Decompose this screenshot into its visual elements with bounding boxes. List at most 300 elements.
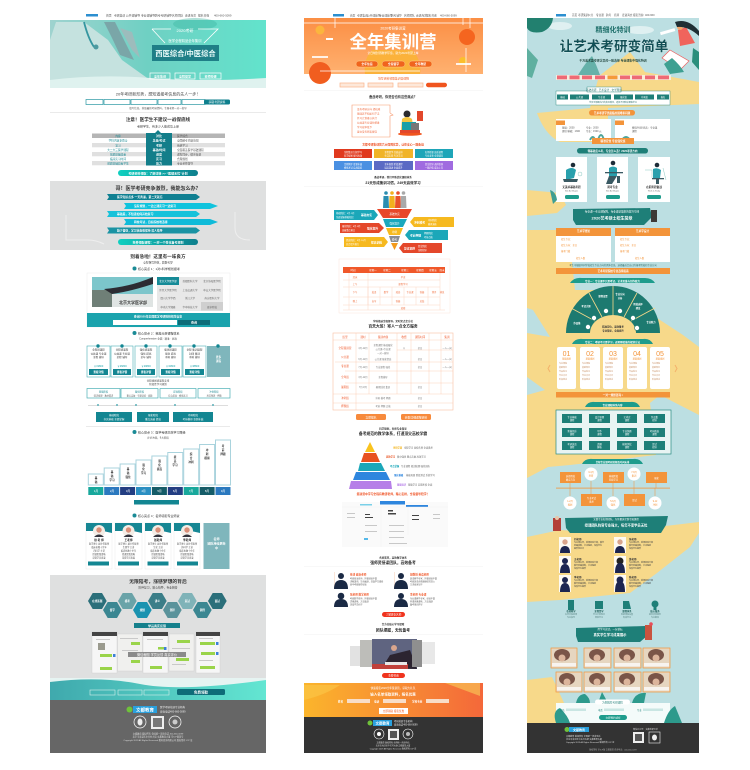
pricing table: 一人一间 xyxy=(442,357,452,361)
teacher profiles: 深受学生喜爱 xyxy=(629,584,641,588)
course form: 报名 xyxy=(661,95,665,99)
service icons: 学习计划制定 xyxy=(593,612,605,616)
footer xyxy=(304,717,483,753)
pyramid chart: 基础学习 定期考核 全面 xyxy=(408,482,433,486)
hexagon badges: 复试 xyxy=(185,599,190,603)
buttons: 获取详细课程资料 xyxy=(405,415,427,419)
pricing table: 6月-12月 xyxy=(358,357,368,361)
course grid: 考研政治 xyxy=(650,429,660,433)
teacher profiles: 深受学生喜爱 xyxy=(629,546,641,550)
panel: annual training camp landing page: 强师资授课团队，高效备考 xyxy=(370,560,416,565)
logo: 医学考研培训专业机构 xyxy=(160,705,186,709)
course grid xyxy=(556,410,671,454)
hero heading: 千万美术类考研学员的一致选择 专业课集中强化特训 xyxy=(579,58,647,62)
footer: Copyright 2019 All Rights Reserved 版权所有 ICP 证 xyxy=(566,740,614,744)
feature cards: 一路护航 成功上岸 xyxy=(425,166,444,170)
pricing table: 专业课程 强化 xyxy=(376,365,391,369)
step chart: 4月 xyxy=(141,489,146,493)
comparison table: 前期基础较差学生 xyxy=(107,162,129,166)
funnel labels: 提高阶段：9月-10月 xyxy=(346,238,366,242)
school grid: 中南大学湘雅 xyxy=(160,305,176,309)
timeline: 考前预测 · 押题 xyxy=(206,394,222,398)
brush heading: teachers: 文都专业名师团队，为你量身定制专属课程 xyxy=(593,517,639,521)
course cards: ￥32800 xyxy=(166,364,176,368)
navigation bar: 报名咨询 xyxy=(426,14,437,18)
school grid: 首都医科大学 xyxy=(182,279,198,283)
pricing table: 3月-12月 xyxy=(358,375,368,379)
comparison table: 前期基础较差 xyxy=(110,152,126,156)
timeline: 3-4月 xyxy=(588,470,594,474)
course cards: 冲刺 辅导 xyxy=(189,355,200,359)
checklist box: 基础差不知如何下手 xyxy=(357,112,380,116)
navigation bar: 跨考 xyxy=(606,13,612,17)
service icons xyxy=(565,600,661,619)
pricing table: 集训内容 xyxy=(378,335,389,339)
course cards: 全程 集训课程 xyxy=(187,348,203,352)
campus photo xyxy=(92,277,153,307)
service icons: 全程督学 xyxy=(594,609,604,613)
course grid: 艺术史 xyxy=(624,415,631,419)
hexagon badges: 讲义 xyxy=(155,599,160,603)
pyramid chart: 强化基础 xyxy=(394,473,404,477)
pricing table: 7月-12月 xyxy=(358,365,368,369)
step chart: 合 xyxy=(190,456,193,460)
school grid: 北京协和医学院 xyxy=(203,279,221,283)
navigation bar: 公共 xyxy=(588,13,594,17)
schedule table: 政治 xyxy=(396,290,401,294)
heading: features: 文都考研集训营六大保障优势，让你安心一路备战 xyxy=(362,142,424,146)
comparison table: 合理规划 xyxy=(177,157,188,161)
button: 了解更多名师 xyxy=(386,613,402,617)
teacher profiles: 李老师 xyxy=(574,575,582,579)
teacher profiles: 授课思路清晰，方法独到 xyxy=(410,600,433,604)
section: alumni feedback xyxy=(50,575,266,679)
five numbered cards: 基础规划 xyxy=(656,356,664,360)
course grid: 考研英语 xyxy=(567,442,577,446)
course grid: 课程 xyxy=(652,432,657,436)
comparison table: 对比 xyxy=(156,133,162,138)
course cards: 全程班课程 xyxy=(92,348,105,352)
navigation bar: 考研集训 xyxy=(578,13,589,17)
footer: 文都教育 版权所有 全国统一咨询电话 xyxy=(376,740,410,744)
timeline: 选择院校 xyxy=(566,474,576,478)
search band: 查询2020年全国医学考研院校招生信息 xyxy=(134,314,182,318)
heading: questions: 备战考研，你是否也有这些痛点？ xyxy=(369,94,417,99)
brush heading: teachers: 授课团队阵容专业强大，每年不变学员无忧 xyxy=(585,522,648,528)
course cards: 查看详情 xyxy=(93,370,104,374)
timeline: 备考 xyxy=(589,500,594,504)
search band: 查询 xyxy=(191,320,197,325)
pink tags xyxy=(556,75,671,80)
five numbered cards: 专业课程 xyxy=(559,361,567,365)
hero banner: 全程督学 xyxy=(388,62,399,66)
service icons: 有效学习 xyxy=(623,615,631,619)
service icons: 提供优质服务 xyxy=(649,612,661,616)
timeline: 阶段性学习规划 xyxy=(149,382,167,386)
teacher cards: 张老师 xyxy=(154,538,162,542)
item heading 3: 核心亮点 3：医学考研高效学习路径 xyxy=(138,430,186,434)
logo xyxy=(126,705,186,714)
teacher cards: 李老师 xyxy=(183,538,191,542)
photo gallery xyxy=(350,639,435,669)
heading: solution: 别着急啦！这里有一味良方 xyxy=(130,253,186,260)
item heading 2: 核心亮点 2：精准分层课程体系 xyxy=(138,330,180,336)
timeline: 专业考试 xyxy=(587,496,597,500)
comparison table: 进度 xyxy=(156,152,162,156)
step chart xyxy=(88,440,230,504)
pricing table: 全日 xyxy=(418,396,422,400)
school grid: 更多院校 xyxy=(207,305,217,309)
info cards: 专业：2000 xyxy=(586,126,599,130)
pricing table: ￥ xyxy=(403,346,405,350)
schedule table: 严格出勤、精准学习，集训效果更有保障 xyxy=(366,260,421,264)
funnel layers: 强化提升 xyxy=(389,222,400,226)
timeline: 9-12 xyxy=(653,501,658,503)
funnel labels xyxy=(334,210,454,253)
feature cards: 复试指导 调剂咨询 xyxy=(425,162,444,166)
schedule table: 时间 xyxy=(350,268,356,272)
enquiry form xyxy=(86,90,230,110)
course grid: 专业快题 xyxy=(622,429,632,433)
navigation bar: 报名咨询 xyxy=(198,14,209,18)
five numbered cards: 作业点评 xyxy=(605,373,613,377)
teal heading xyxy=(577,148,648,154)
panel: medical exam landing page: 考研学生，有多少人能成功上岸 xyxy=(137,124,179,128)
pricing table: 暑期封闭 集训 xyxy=(376,385,391,389)
call-to-action button: 考研资料领取：了解详情 >> “医硕无忧”计划 xyxy=(128,170,188,175)
step chart: 1月 xyxy=(94,489,98,493)
orange-header panels xyxy=(556,228,670,274)
course cards: 强化班课程 xyxy=(164,348,177,352)
schedule table: 答疑 xyxy=(420,290,425,294)
schedule table: 数学 xyxy=(384,290,389,294)
pricing table: 收费 xyxy=(401,335,407,339)
service icons: 督促学习 xyxy=(595,615,603,619)
schedule table: 下午 xyxy=(353,290,358,294)
timetable screenshot xyxy=(342,501,448,547)
orange-header panels: 艺术学理论 xyxy=(577,229,590,233)
timeline: 系统学习 xyxy=(609,478,619,482)
search band xyxy=(87,313,230,327)
button xyxy=(134,623,180,628)
checklist box: 身边没有研友督促 xyxy=(357,130,378,134)
heading: campus: 全方位贴心学习保障 xyxy=(382,622,405,626)
pricing table: 暑期班 xyxy=(341,385,349,389)
brush heading: students xyxy=(576,622,653,642)
five numbered cards: 基础知识 xyxy=(605,365,613,369)
teacher profiles: 专业课名师，授课经验丰富 xyxy=(629,560,653,564)
timeline: 强化 xyxy=(611,502,616,506)
checklist box: 学习效率低下 xyxy=(357,125,373,129)
schedule table: 就寝 xyxy=(401,306,406,310)
teacher cards: 名师 xyxy=(213,536,220,541)
panel: annual training camp landing page: 备考规范的教学体系，打通顶尖高校学霸 xyxy=(359,431,427,436)
teacher cards: 深受学员喜爱 xyxy=(122,556,136,560)
orange-header panels: 报考门槛 xyxy=(620,249,630,253)
hero heading: 精细化特训 xyxy=(596,25,630,34)
navigation bar: 走进海文 xyxy=(185,14,196,18)
orange signup band: 学校专业 xyxy=(412,700,423,704)
step chart: 化 xyxy=(142,467,145,471)
step chart: 提高 xyxy=(157,467,162,471)
footer: 文都教育 xyxy=(573,727,585,732)
navigation bar: 名师团队 xyxy=(172,14,183,18)
hero title: 西医综合/中医综合 xyxy=(155,49,216,58)
course cards: ￥29800 xyxy=(141,364,151,368)
timeline: 知识梳理 · 教材精讲 xyxy=(94,394,114,398)
five numbered cards: 作品练习 xyxy=(582,369,590,373)
hero banner: doctor: 全年集训 xyxy=(154,74,166,78)
course grid: 课程 xyxy=(625,432,630,436)
teacher cards: 临床执教十余年 xyxy=(91,545,107,549)
buttons: 立即报名 xyxy=(365,415,377,419)
pricing table: 全程课程 基础强化 xyxy=(373,343,393,347)
footer: 微信公众号：文都考研艺术 xyxy=(633,727,658,731)
funnel labels: 强化阶段：6月-8月 xyxy=(342,224,360,228)
teacher profiles: 深受学生喜爱 xyxy=(629,566,641,570)
course cards: 查看详情 xyxy=(117,370,128,374)
funnel labels: 考前押题 xyxy=(410,234,421,238)
heading: services: 学科筛选全程督导，定时定点全方位 xyxy=(373,319,413,323)
service icons: 专业指导 xyxy=(567,615,575,619)
schedule table: 周末 xyxy=(439,268,445,272)
section: alumni feedback: 无限陪考，涨感梦想的背后 xyxy=(129,578,187,585)
navigation bar xyxy=(556,13,655,17)
semicircle fan chart: 建议 xyxy=(636,306,641,310)
teacher cards: 外科学 主讲 xyxy=(181,545,194,549)
teal heading 3 xyxy=(572,339,653,344)
pricing table: 全日 xyxy=(418,365,422,369)
step chart: 基 xyxy=(111,470,114,474)
comparison table: 基础/时间 xyxy=(153,147,165,152)
orange pill heading: 艺术考研学员面临的困难和问题 xyxy=(594,111,631,115)
three illustration cards: Non Art Majors xyxy=(606,190,619,192)
navigation bar xyxy=(333,14,457,18)
teacher cards: 医学博士 副主任医师 xyxy=(89,542,110,546)
funnel layers: 模考 xyxy=(392,238,398,242)
service icons: 课程体系 xyxy=(622,609,632,613)
teacher profiles: 考研数学名师，授课经验丰富 xyxy=(350,596,377,600)
pricing table: 全日 xyxy=(418,346,422,350)
five numbered cards: 阶段测试 xyxy=(629,377,637,381)
step chart: 础 xyxy=(127,471,130,475)
step chart: 提 xyxy=(174,455,177,459)
hero banner: doctor: 全程督学 xyxy=(179,74,191,78)
pricing table: 冲刺班 xyxy=(341,396,349,400)
signup form with leaves: 电话 xyxy=(598,708,603,712)
orange-header panels: 招生专业： xyxy=(620,237,632,241)
course cards: 全程 辅导 xyxy=(117,355,128,359)
button: 免费咨询 xyxy=(388,674,399,678)
schedule table: 休息 xyxy=(440,290,445,294)
course cards: 全程 辅导 xyxy=(93,355,104,359)
navigation bar: 400-660-5099 xyxy=(214,14,232,18)
teacher profiles: 深受学员好评 xyxy=(350,602,362,606)
arrow list: 没有规划，一边上课实习一边复习 xyxy=(134,204,176,208)
teacher cards: 团队持续更新 xyxy=(207,540,226,546)
step chart: 3月 xyxy=(126,489,130,493)
timeline: 1-2月 xyxy=(567,499,573,503)
teacher profiles: 专业课名师，授课经验丰富 xyxy=(574,578,598,582)
enquiry form: 获取考研资料 xyxy=(209,100,226,104)
navigation bar: 公共课辅导 xyxy=(126,14,140,18)
brush heading: students: 真实学生学习成果展示 xyxy=(594,632,627,637)
semicircle fan chart xyxy=(566,286,660,333)
item heading 3 xyxy=(132,430,186,440)
teacher cards: 授课思路清晰 xyxy=(122,552,136,556)
course form xyxy=(556,87,670,105)
course cards: 公共课 专业课 xyxy=(114,352,130,356)
panel: art exam intensive training page xyxy=(527,13,699,753)
timeline: 强化 xyxy=(654,476,659,480)
teacher profiles: 胡教授 英语老师 xyxy=(410,572,429,576)
hero title: 全年集训营 xyxy=(350,32,436,52)
funnel labels: 基础夯实 xyxy=(361,213,372,217)
course grid: 课程 xyxy=(597,432,602,436)
navigation bar: 400-660-5099 xyxy=(440,14,457,18)
semicircle fan chart: 考试大纲 xyxy=(581,304,591,308)
feature cards: 全程集训 封闭学习 xyxy=(344,150,362,154)
arrow list: 基础差，不知道如何开始复习 xyxy=(117,212,154,216)
course cards: 全年 辅导 xyxy=(141,355,152,359)
course cards: ￥26800 xyxy=(117,364,127,368)
item heading 4: 核心亮点 4：名师领衔专业师资 xyxy=(138,513,180,518)
arrow list xyxy=(107,194,218,234)
school grid: 上海交通大学 xyxy=(182,288,198,292)
orange pill heading xyxy=(589,110,635,116)
timeline: 考前模拟 查漏补缺 xyxy=(183,417,204,421)
people xyxy=(383,191,406,208)
orange-header panels: 招生方向：全日 xyxy=(620,243,636,247)
step chart: 基 xyxy=(127,467,130,471)
feature cards: 层层递进 全面提升 xyxy=(384,166,403,170)
heading: pyramid: 科学规划，名师专业指导 xyxy=(379,426,407,430)
comparison table: 课程同步，循序渐进 xyxy=(177,152,201,156)
orange-header panels: 招生人数 xyxy=(576,256,586,260)
teacher cards: 徐 老 师 xyxy=(94,538,104,542)
comparison table: 全国统考内容范围 xyxy=(177,138,199,142)
course grid: 复试 xyxy=(652,442,657,446)
hero banner: doctor: 名师授课 xyxy=(204,74,217,78)
step chart: 押题 xyxy=(220,452,226,456)
pricing table: 课时 xyxy=(360,335,366,339)
step chart: 5月 xyxy=(157,489,162,493)
course grid: 指导 xyxy=(652,418,657,422)
timeline: 规划 xyxy=(568,502,573,506)
comparison table: 大二大三医学课程 xyxy=(107,148,129,152)
five numbered cards: 作品练习 xyxy=(559,369,567,373)
panel: medical exam landing page xyxy=(50,14,266,753)
course cards: ￥19800 xyxy=(94,364,104,368)
orange-header panels: 招生专业： xyxy=(561,237,572,241)
five numbered cards: 基础知识 xyxy=(652,365,660,369)
brush heading xyxy=(573,208,657,225)
enquiry form: 填写资料领取集训营课程 xyxy=(378,76,409,80)
course cards: 查看详情 xyxy=(189,370,200,374)
teacher profiles: 专业课名师，授课经验丰富 xyxy=(574,560,598,564)
pricing table: 课程时间 xyxy=(415,335,426,339)
funnel labels: 全面掌握基础知识 xyxy=(336,215,354,219)
timeline: 考研 xyxy=(589,474,594,478)
funnel labels: 综合提升能力 xyxy=(346,242,359,246)
step chart: 冲 xyxy=(206,448,209,452)
service icons: 系统课程设置 xyxy=(621,612,633,616)
teacher profiles: 张老师 数学老师 xyxy=(350,592,369,596)
course cards: ￥38800 xyxy=(190,364,200,368)
navigation bar: 首页 xyxy=(572,13,578,17)
pricing table: 班型 xyxy=(342,335,348,339)
funnel labels: 强化提升 xyxy=(367,226,378,230)
five numbered cards: 基础知识 xyxy=(559,365,567,369)
pyramid chart: 基础巩固 阶段测试 系统学习 xyxy=(406,473,436,477)
step chart: 高 xyxy=(174,459,177,463)
hero banner: doctor xyxy=(50,18,266,88)
item heading 3: 步步为营，9大阶段 xyxy=(147,436,169,440)
button xyxy=(382,673,405,678)
timeline: 综合提高 · 模拟练习 xyxy=(168,394,188,398)
comparison table: 临床实习时间 xyxy=(110,157,126,161)
course form: 基础考研 · 艺术设计 · 文学理论 xyxy=(586,88,622,92)
timeline: 7-8月 xyxy=(631,470,637,474)
hero banner: 全年住宿 xyxy=(361,62,373,66)
navigation bar: 公共课辅导 xyxy=(367,14,381,18)
navigation bar: 考研集训 xyxy=(357,14,368,18)
pricing table: 一人一间 xyxy=(442,365,452,369)
panel: annual training camp landing page: 21天形成集训习惯，249天高效学习 xyxy=(365,180,421,185)
teacher cards: 中 xyxy=(215,545,218,550)
footer: Copyright 2019 All Rights Reserved 版权所有 ICP 证 xyxy=(370,746,416,750)
teacher profiles: 教学思路清晰，方法独到 xyxy=(574,563,596,567)
timeline: 强化阶段 xyxy=(148,413,158,417)
three illustration cards xyxy=(556,157,670,202)
funnel labels: 突破重点难点 xyxy=(342,228,356,232)
signup form with leaves xyxy=(555,692,682,723)
pyramid chart: 基础知识 xyxy=(397,482,407,486)
hero banner: 全年教研 xyxy=(415,62,426,66)
comparison table: 总量/考试 xyxy=(153,138,165,142)
item heading 2: Comprehensive 全面 · 精准 · 高效 xyxy=(139,336,177,340)
school grid: 复旦大学医学院 xyxy=(159,288,177,292)
schedule table: 起床 xyxy=(353,275,358,279)
five numbered cards: 基础规划 xyxy=(562,356,571,360)
chat screenshots: 微信截图 学员反馈 真实评价 xyxy=(137,652,178,657)
five numbered cards: 基础知识 xyxy=(582,365,590,369)
five numbered cards: 基础规划 xyxy=(586,356,594,360)
footer: 文都教育 版权所有 全国统一咨询电话 400-660-5099 xyxy=(133,732,184,736)
footer xyxy=(50,700,266,753)
course grid: 课程 xyxy=(570,418,575,422)
schedule table: 测评 xyxy=(432,290,437,294)
step chart: 8月 xyxy=(205,489,209,493)
item heading 2 xyxy=(132,330,180,340)
step chart: 考 xyxy=(222,444,225,448)
semicircle fan chart: 分析 xyxy=(618,296,623,300)
schedule table: 课程学习 xyxy=(398,282,408,286)
info cards: 专业：1500 元 xyxy=(586,129,602,133)
five numbered cards: 基础规划 xyxy=(609,356,617,360)
footer: Copyright 2019 All Rights Reserved 教育咨询有限公司 版权所有 ICP 证 xyxy=(123,738,193,742)
navigation bar xyxy=(86,14,232,18)
timeline xyxy=(87,378,230,422)
five numbered cards: 基础知识 xyxy=(629,365,637,369)
feature cards: 模拟考试 实战演练 xyxy=(344,166,363,170)
timeline: 基础阶段 xyxy=(99,390,109,394)
funnel labels: 冲刺模考 xyxy=(414,220,425,224)
pricing table: 全日 xyxy=(418,404,422,408)
teal heading 3: 专业二：考研不只是学习，还需要精准的规划方法 xyxy=(585,340,640,344)
teacher cards: 内科学 主讲 xyxy=(93,548,106,552)
five numbered cards: 作品练习 xyxy=(629,369,637,373)
